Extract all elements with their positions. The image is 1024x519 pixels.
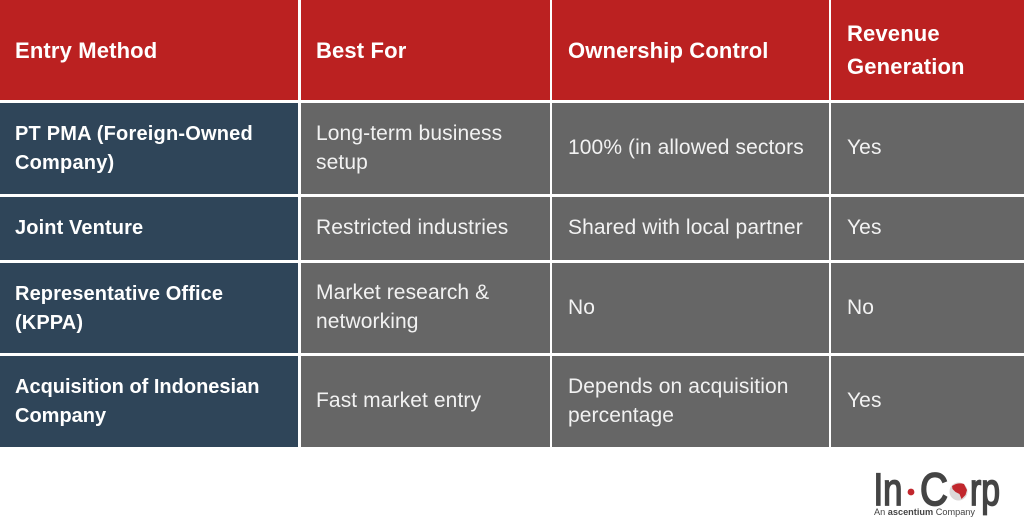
cell: Acquisition revenue: Yes <box>847 389 882 412</box>
cell: Acquisition revenue <box>831 356 1024 447</box>
header: Revenue Generation <box>831 0 1024 100</box>
header: Revenue Generation: Revenue <box>847 21 940 46</box>
row label: Representative Office: (KPPA) <box>15 312 83 334</box>
cell: Representative Office ownership <box>552 262 828 353</box>
cell: Acquisition ownership: percentage <box>568 404 674 427</box>
cell: Joint Venture ownership <box>552 196 828 260</box>
cell: Joint Venture best for <box>301 196 550 260</box>
cell: PT PMA revenue: Yes <box>847 136 882 159</box>
header: Best For: Best For <box>316 38 406 62</box>
logo: InCorp: rp <box>970 464 1000 515</box>
row label: Representative Office <box>0 262 298 353</box>
row label: PT PMA: Company) <box>15 152 114 174</box>
header: Ownership Control: Ownership Control <box>568 38 769 62</box>
cell: Representative Office best for: networking <box>316 310 419 333</box>
logo: InCorp <box>874 464 1000 517</box>
cell: Joint Venture revenue: Yes <box>847 216 882 239</box>
row label: Acquisition: Acquisition of Indonesian <box>15 376 259 398</box>
header: Entry Method: Entry Method <box>15 38 157 62</box>
cell: Joint Venture revenue <box>831 196 1024 260</box>
cell: PT PMA revenue <box>831 103 1024 194</box>
cell: Representative Office revenue <box>831 262 1024 353</box>
cell: Acquisition ownership <box>552 356 828 447</box>
row label: Joint Venture: Joint Venture <box>15 216 143 238</box>
header: Entry Method <box>0 0 298 100</box>
cell: Representative Office best for: Market research & <box>316 281 489 304</box>
row label: Representative Office: Representative Office <box>15 283 223 305</box>
header: Best For <box>301 0 550 100</box>
cell: PT PMA ownership <box>552 103 828 194</box>
cell: Joint Venture best for: Restricted industries <box>316 216 508 239</box>
cell: Representative Office ownership: No <box>568 296 595 319</box>
row label: PT PMA: PT PMA (Foreign-Owned <box>15 123 253 145</box>
cell: PT PMA best for: setup <box>316 151 368 174</box>
row label: Acquisition: Company <box>15 405 106 427</box>
header: Revenue Generation: Generation <box>847 54 965 79</box>
logo: InCorp: An ascentium Company <box>874 507 975 517</box>
cell: PT PMA ownership: 100% (in allowed sectors <box>568 136 804 159</box>
cell: PT PMA best for <box>301 103 550 194</box>
row label: PT PMA <box>0 103 298 194</box>
row label: Acquisition <box>0 356 298 447</box>
cell: Acquisition ownership: Depends on acquisition <box>568 375 789 398</box>
row label: Joint Venture <box>0 196 298 260</box>
logo: InCorp: C <box>920 464 948 515</box>
cell: Acquisition best for <box>301 356 550 447</box>
cell: Representative Office revenue: No <box>847 296 874 319</box>
cell: Joint Venture ownership: Shared with local partner <box>568 216 803 239</box>
cell: Acquisition best for: Fast market entry <box>316 389 481 412</box>
cell: PT PMA best for: Long-term business <box>316 122 502 145</box>
cell: Representative Office best for <box>301 262 550 353</box>
header: Ownership Control <box>552 0 828 100</box>
logo: InCorp: In <box>874 464 902 515</box>
